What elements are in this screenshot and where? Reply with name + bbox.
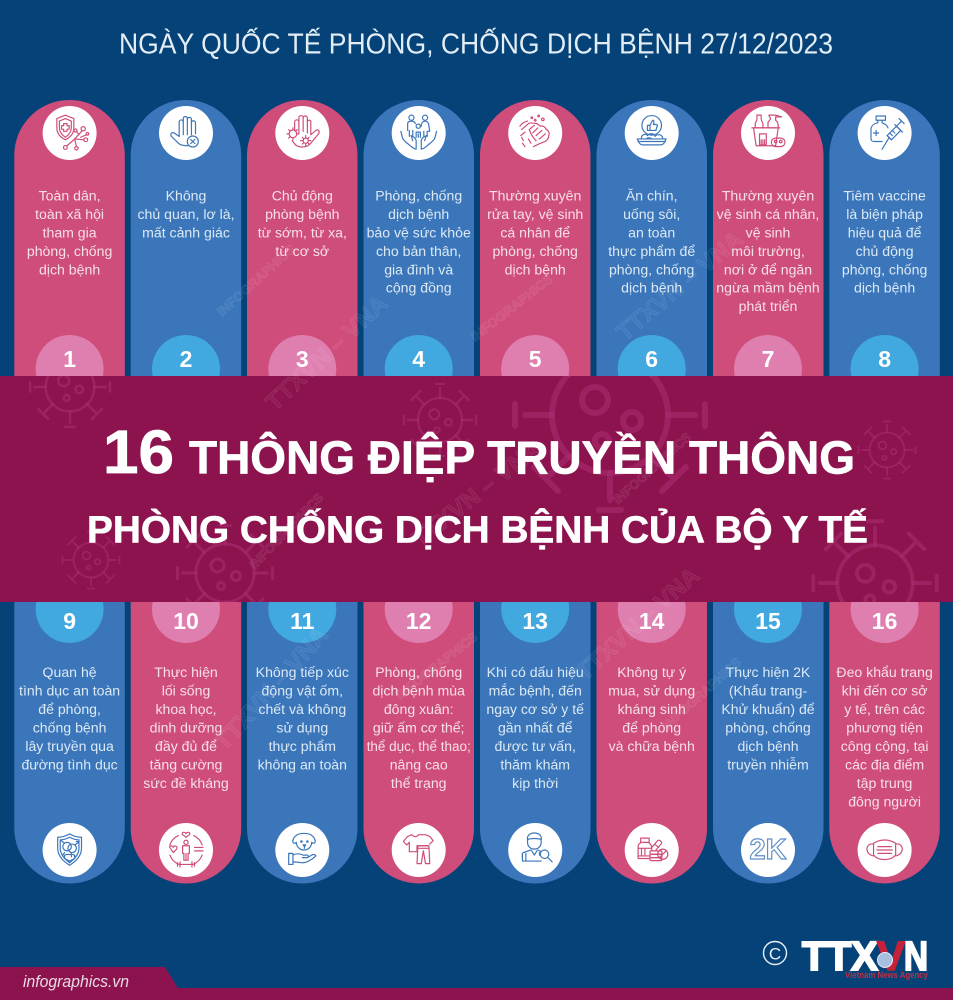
text 12: giữ ấm cơ thể; xyxy=(373,720,464,736)
icon circle 7 xyxy=(741,106,795,160)
text 6: thực phẩm để xyxy=(608,243,695,259)
watermarks: INFOGRAPHICS xyxy=(393,629,481,702)
panel: message 6 xyxy=(596,100,707,376)
icon circle 4 xyxy=(392,106,446,160)
text 4: dịch bệnh xyxy=(388,206,449,222)
text 6: dịch bệnh xyxy=(621,280,682,296)
icon circle 6 xyxy=(625,106,679,160)
watermarks: TTXVN – VNA xyxy=(612,226,748,347)
text 4: bảo vệ sức khỏe xyxy=(367,224,471,240)
text 1: toàn xã hội xyxy=(35,206,104,222)
text 16: y tế, trên các xyxy=(844,701,925,717)
number 5: 5 xyxy=(529,346,542,372)
pill 2 xyxy=(131,100,241,376)
number 7: 7 xyxy=(762,346,774,372)
panel: message 4 xyxy=(364,100,474,376)
watermarks: TTXVN – VNA xyxy=(571,562,705,686)
number 1: 1 xyxy=(63,346,76,372)
logo: TTXVN xyxy=(802,933,928,980)
text 10: lối sống xyxy=(162,682,210,698)
text 2: mất cảnh giác xyxy=(142,224,230,240)
number 2: 2 xyxy=(180,346,192,372)
icon: thumbs up over food plate xyxy=(637,116,666,145)
icon circle 16 xyxy=(858,823,912,877)
icon circle 1 xyxy=(43,106,97,160)
headline line 1: THÔNG ĐIỆP TRUYỀN THÔNG xyxy=(189,432,855,484)
panel: message 10 xyxy=(131,602,241,884)
number circle 12 xyxy=(385,602,453,643)
text 14: Không tự ý xyxy=(617,664,687,680)
text 7: ngừa mầm bệnh xyxy=(716,280,820,296)
text 7: Thường xuyên xyxy=(722,188,814,204)
text 7: vệ sinh xyxy=(746,224,790,240)
icon: medicine bottle and pills xyxy=(638,838,668,861)
text 5: dịch bệnh xyxy=(505,261,566,277)
icon: healthy lifestyle ring xyxy=(170,832,203,867)
text 12: thể dục, thể thao; xyxy=(367,738,471,754)
watermarks: TTXVN – VNA xyxy=(261,290,393,416)
panel: message 7 xyxy=(713,100,824,376)
number circle 10 xyxy=(152,602,220,643)
text 10: tăng cường xyxy=(150,756,222,772)
watermarks: TTXVN – VNA xyxy=(209,622,334,756)
text 9: Quan hệ xyxy=(43,664,97,680)
text 10: sức đề kháng xyxy=(143,775,229,791)
text 10: Thực hiện xyxy=(154,664,218,680)
copyright symbol: C xyxy=(769,944,781,964)
panel: message 5 xyxy=(480,100,590,376)
icon circle 14 xyxy=(625,823,679,877)
text 3: từ sớm, từ xa, xyxy=(258,224,347,240)
number 12: 12 xyxy=(406,608,431,634)
number circle 14 xyxy=(618,602,686,643)
number circle 7 xyxy=(734,335,802,376)
text 4: gia đình và xyxy=(384,261,453,277)
text 11: thực phẩm xyxy=(269,738,336,754)
number 11: 11 xyxy=(290,608,315,634)
icon: face mask xyxy=(867,840,902,860)
footer band xyxy=(0,967,953,1000)
icon: family in hands xyxy=(401,115,437,149)
number 6: 6 xyxy=(645,346,658,372)
text 5: rửa tay, vệ sinh xyxy=(487,206,583,222)
number 14: 14 xyxy=(639,608,665,634)
icon circle 10 xyxy=(159,823,213,877)
text 7: phát triển xyxy=(739,298,797,314)
panel: message 2 xyxy=(131,100,241,376)
number 4: 4 xyxy=(412,346,425,372)
panel: message 9 xyxy=(14,602,125,884)
pill 1 xyxy=(14,100,125,376)
text 12: Phòng, chống xyxy=(375,664,462,680)
text 16: các địa điểm xyxy=(845,756,924,772)
text 16: khi đến cơ sở xyxy=(842,682,928,698)
text 4: cho bản thân, xyxy=(376,243,461,259)
text 13: gần nhất để xyxy=(498,720,573,736)
panel: message 11 xyxy=(247,602,358,884)
panel: message 3 xyxy=(247,100,358,376)
text 12: thể trạng xyxy=(391,775,447,791)
text 13: được tư vấn, xyxy=(495,738,576,754)
number 9: 9 xyxy=(63,608,76,634)
pill 4 xyxy=(364,100,474,376)
number circle 15 xyxy=(734,602,802,643)
text 13: ngay cơ sở y tế xyxy=(486,701,584,717)
text 7: vệ sinh cá nhân, xyxy=(717,206,819,222)
logo: TTXVN: Vietnam News Agency xyxy=(845,970,928,980)
text 12: nâng cao xyxy=(390,756,448,772)
panel: message 14 xyxy=(596,602,707,884)
pill 13 xyxy=(480,602,590,884)
panel: message 8 xyxy=(829,100,940,376)
icon: 2K: 2K xyxy=(749,834,787,866)
copyright symbol xyxy=(764,942,786,964)
number circle 1 xyxy=(36,335,104,376)
watermarks: INFOGRAPHICS xyxy=(660,654,744,732)
watermarks: INFOGRAPHICS xyxy=(246,490,327,572)
text 11: Không tiếp xúc xyxy=(256,664,349,680)
text 15: dịch bệnh xyxy=(737,738,799,754)
panel: message 12 xyxy=(364,602,474,883)
text 1: tham gia xyxy=(43,224,97,240)
text 15: (Khẩu trang- xyxy=(729,682,807,698)
text 10: dinh dưỡng xyxy=(150,720,222,736)
icon: doctor with magnifier xyxy=(522,833,552,862)
icon circle 9 xyxy=(43,823,97,877)
number 15: 15 xyxy=(755,608,781,634)
text 16: Đeo khẩu trang xyxy=(836,664,933,680)
text 11: động vật ốm, xyxy=(262,682,343,698)
text 9: tình dục an toàn xyxy=(19,682,120,698)
pill 7 xyxy=(713,100,824,376)
pill 8 xyxy=(829,100,940,376)
text 6: uống sôi, xyxy=(623,206,680,222)
number 16: 16 xyxy=(872,608,897,634)
pill 12 xyxy=(364,602,474,883)
pill 3 xyxy=(247,100,358,376)
number circle 4 xyxy=(385,335,453,376)
banner background xyxy=(0,376,953,602)
text 3: từ cơ sở xyxy=(275,243,329,259)
pill 10 xyxy=(131,602,241,884)
icon circle 11 xyxy=(275,823,329,877)
text 7: môi trường, xyxy=(731,243,805,259)
watermarks: INFOGRAPHICS xyxy=(610,429,694,507)
footer website label: infographics.vn xyxy=(23,972,129,991)
text 16: đông người xyxy=(848,794,921,810)
icon: shield with gender symbols xyxy=(58,834,82,865)
icon circle 3 xyxy=(275,106,329,160)
text 4: cộng đồng xyxy=(386,280,452,296)
icon: t-shirt and trousers xyxy=(403,835,433,864)
number circle 6 xyxy=(618,335,686,376)
icon: washing hands xyxy=(520,115,549,147)
text 14: và chữa bệnh xyxy=(609,738,695,754)
text 5: Thường xuyên xyxy=(489,188,581,204)
number circle 16 xyxy=(851,602,919,643)
text 8: phòng, chống xyxy=(842,261,927,277)
pill 5 xyxy=(480,100,590,376)
text 5: phòng, chống xyxy=(492,243,578,259)
number 13: 13 xyxy=(522,608,548,634)
pill 11 xyxy=(247,602,358,884)
icon circle 12 xyxy=(392,823,446,877)
logo: TTXVN: N xyxy=(904,933,928,979)
text 5: cá nhân để xyxy=(500,224,570,240)
text 6: phòng, chống xyxy=(609,261,694,277)
number circle 8 xyxy=(851,335,919,376)
text 6: an toàn xyxy=(628,224,675,240)
logo: TTXVN: TTX xyxy=(802,933,878,979)
number circle 5 xyxy=(501,335,569,376)
text 15: Thực hiện 2K xyxy=(726,664,811,680)
text 9: để phòng, xyxy=(38,701,101,717)
text 13: kịp thời xyxy=(512,775,558,791)
text 4: Phòng, chống xyxy=(375,188,462,204)
text 9: đường tình dục xyxy=(21,756,118,772)
number circle 11 xyxy=(268,602,336,643)
logo: TTXVN: V xyxy=(877,933,906,979)
icon circle 13 xyxy=(508,823,562,877)
text 1: phòng, chống xyxy=(27,243,112,259)
watermarks: INFOGRAPHICS xyxy=(468,271,556,344)
text 13: Khi có dấu hiệu xyxy=(487,664,584,680)
text 3: phòng bệnh xyxy=(265,206,340,222)
text 13: thăm khám xyxy=(500,756,570,772)
banner xyxy=(0,376,953,602)
icon: hand and viruses xyxy=(287,116,319,147)
number circle 9 xyxy=(36,602,104,643)
text 9: chống bệnh xyxy=(33,720,106,736)
banner virus pattern xyxy=(29,376,938,602)
text 14: kháng sinh xyxy=(618,701,686,717)
icon circle 5 xyxy=(508,106,562,160)
pill 6 xyxy=(596,100,707,376)
text 2: Không xyxy=(166,188,206,204)
text 8: hiệu quả để xyxy=(848,224,922,240)
text 15: phòng, chống xyxy=(725,720,811,736)
headline line 1 xyxy=(103,418,855,486)
text 1: dịch bệnh xyxy=(39,261,100,277)
watermarks xyxy=(209,226,748,756)
text 10: đầy đủ để xyxy=(155,738,217,754)
icon circle 8 xyxy=(858,106,912,160)
number circle 2 xyxy=(152,335,220,376)
text 6: Ăn chín, xyxy=(626,188,678,204)
panel: message 13 xyxy=(480,602,590,884)
text 8: dịch bệnh xyxy=(854,280,915,296)
icon: dog on hand xyxy=(289,833,316,864)
text 8: là biện pháp xyxy=(846,206,923,222)
text 16: công cộng, tại xyxy=(841,738,928,754)
icon circle 15 xyxy=(741,823,795,877)
headline line 1: 16 xyxy=(103,418,174,486)
headline line 2: PHÒNG CHỐNG DỊCH BỆNH CỦA BỘ Y TẾ xyxy=(87,506,868,552)
watermarks: INFOGRAPHICS xyxy=(214,241,298,319)
panel: message 1 xyxy=(14,100,125,376)
number 10: 10 xyxy=(173,608,199,634)
text 15: Khử khuẩn) để xyxy=(721,701,815,717)
pill 14 xyxy=(596,602,707,884)
icon: shield and virus xyxy=(57,115,89,150)
text 15: truyền nhiễm xyxy=(727,756,809,772)
text 7: nơi ở để ngăn xyxy=(724,261,812,277)
text 9: lây truyền qua xyxy=(25,738,114,754)
text 13: mắc bệnh, đến xyxy=(489,682,582,698)
text 8: chủ động xyxy=(856,243,914,259)
number 3: 3 xyxy=(296,346,309,372)
text 11: không an toàn xyxy=(258,756,347,772)
pill 16 xyxy=(829,602,940,883)
text 11: sử dụng xyxy=(276,720,328,736)
text 2: chủ quan, lơ là, xyxy=(138,206,234,222)
watermarks: TTXVN – VNA xyxy=(407,435,547,553)
title: NGÀY QUỐC TẾ PHÒNG, CHỐNG DỊCH BỆNH 27/12/2023 xyxy=(119,26,833,60)
text 11: chết và không xyxy=(258,701,346,717)
text 12: dịch bệnh mùa xyxy=(372,682,465,698)
text 1: Toàn dân, xyxy=(39,188,101,204)
pill 9 xyxy=(14,602,125,884)
number circle 13 xyxy=(501,602,569,643)
text 14: để phòng xyxy=(622,720,681,736)
icon: cleaning supplies xyxy=(752,115,785,147)
text 10: khoa học, xyxy=(155,701,217,717)
text 8: Tiêm vaccine xyxy=(843,188,926,204)
panel: message 15 xyxy=(713,602,824,884)
icon: raised hand with cross xyxy=(171,117,198,147)
pill 15 xyxy=(713,602,824,884)
icon: vaccine vial and syringe xyxy=(871,116,904,149)
number circle 3 xyxy=(268,335,336,376)
text 16: phương tiện xyxy=(846,720,923,736)
text 3: Chủ động xyxy=(272,188,333,204)
text 16: tập trung xyxy=(857,775,912,791)
text 14: mua, sử dụng xyxy=(608,682,695,698)
panel: message 16 xyxy=(829,602,940,883)
text 12: đông xuân: xyxy=(384,701,454,717)
number 8: 8 xyxy=(878,346,891,372)
icon circle 2 xyxy=(159,106,213,160)
